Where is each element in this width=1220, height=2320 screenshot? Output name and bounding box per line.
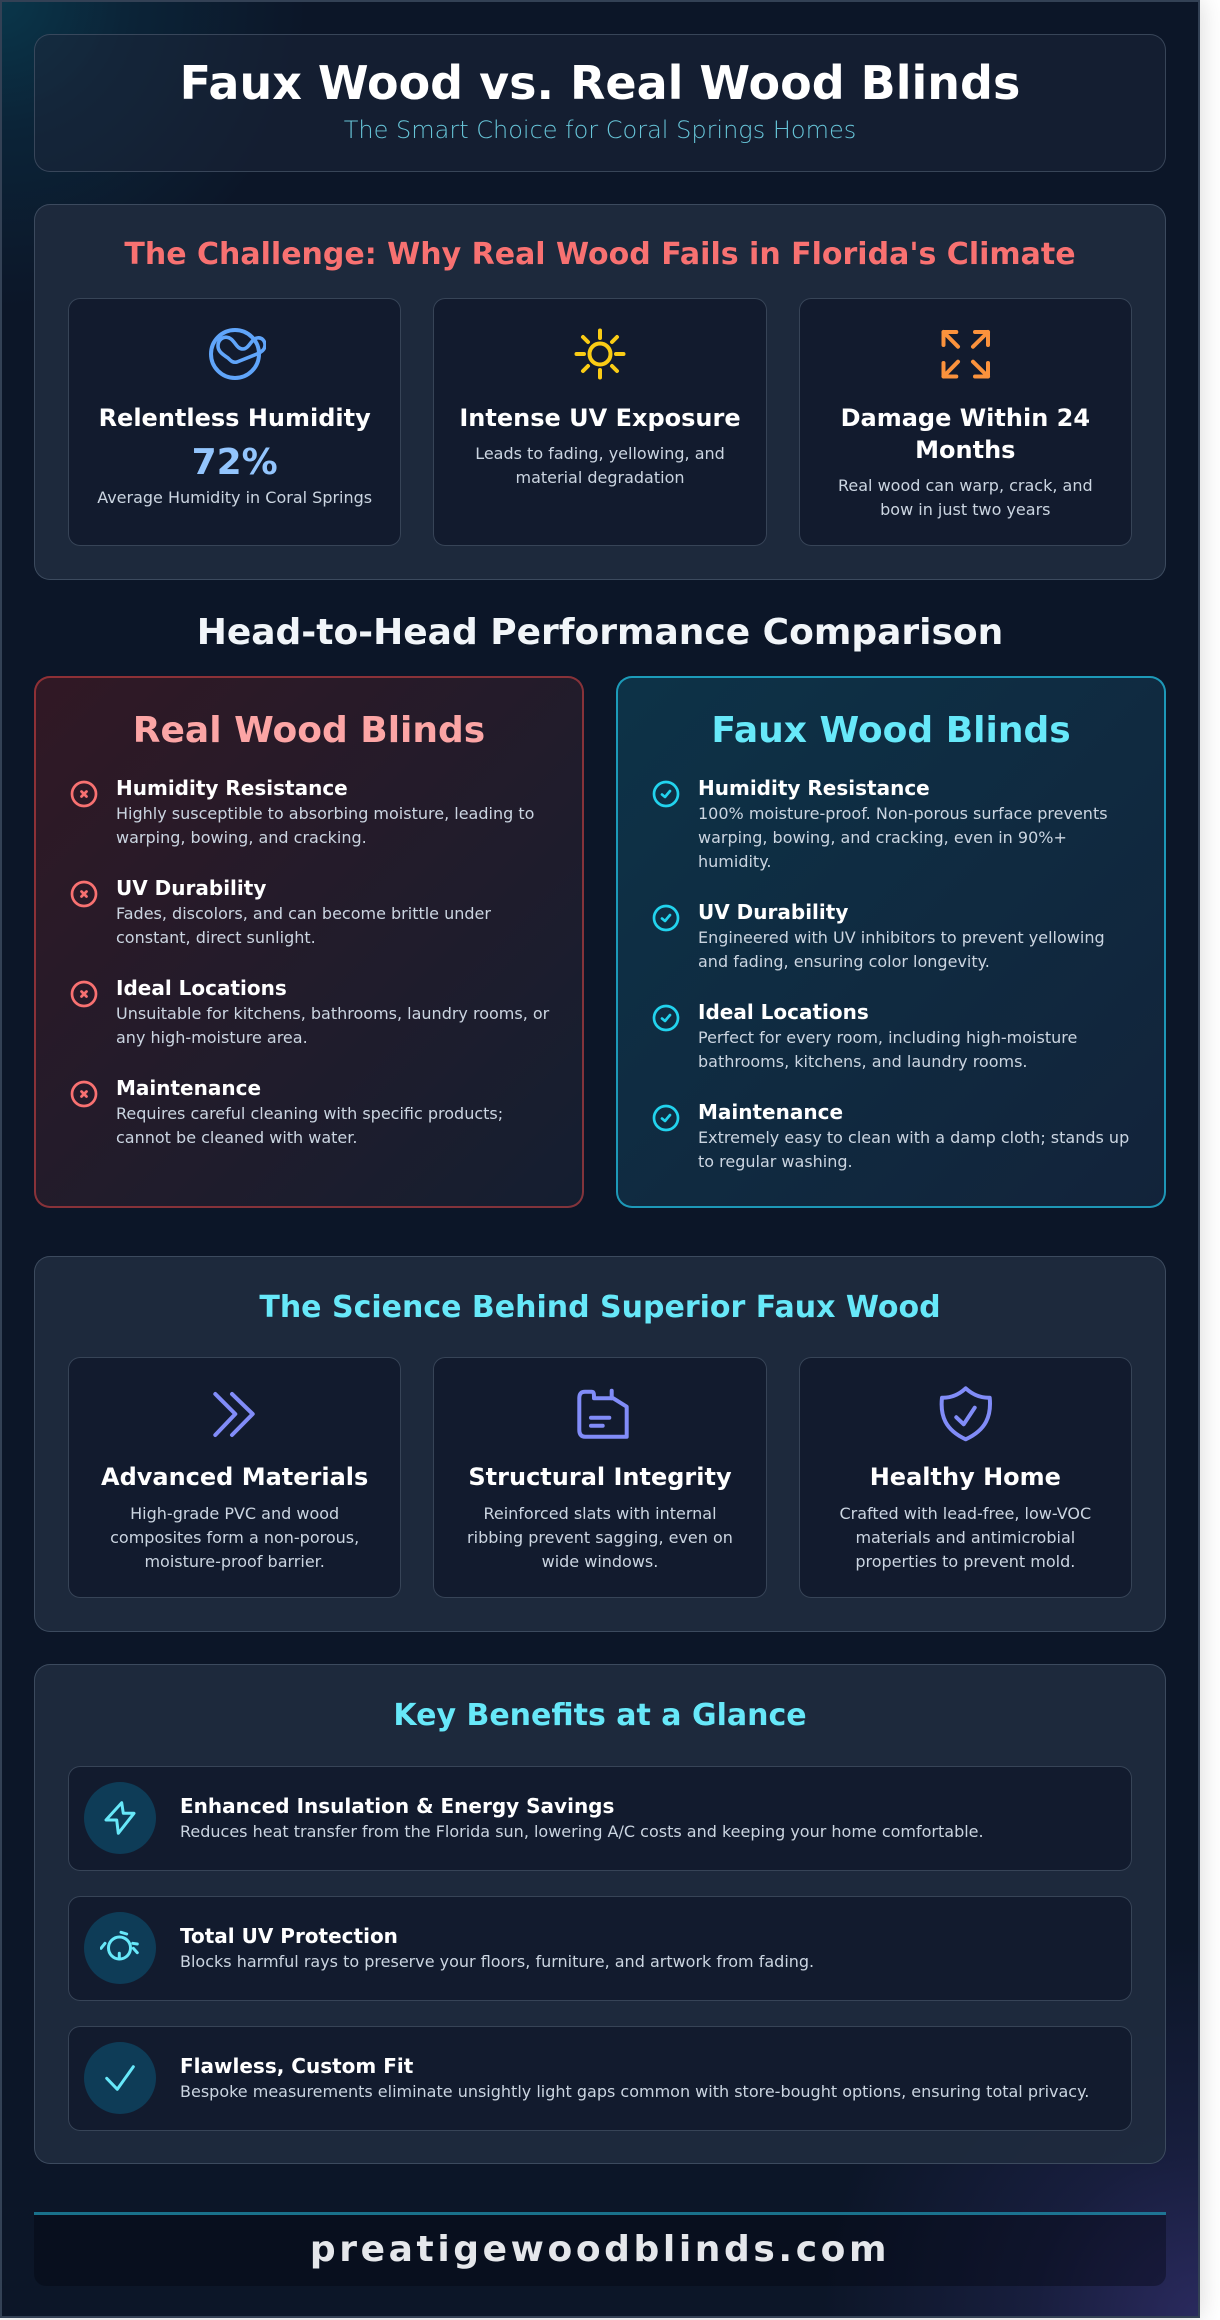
benefit: uv protection: Total UV Protection	[180, 1924, 398, 1948]
item: maintenance: Maintenance	[698, 1100, 843, 1124]
card: intense uv exposure	[433, 298, 767, 546]
heading: comparison: Head-to-Head Performance Comparison	[197, 612, 1003, 653]
icon: humidity swirl	[209, 328, 266, 380]
card text: Leads to fading, yellowing, and	[475, 444, 725, 463]
item: humidity resistance	[652, 776, 1108, 871]
item: humidity resistance: Humidity Resistance	[698, 776, 930, 800]
icon: dial with rays	[84, 1912, 156, 1984]
icon: double chevron	[213, 1392, 255, 1438]
item: uv durability	[70, 876, 491, 947]
item: humidity resistance: 100% moisture-proof. Non-porous surface prevents	[698, 804, 1108, 823]
icon: sun	[574, 328, 626, 380]
icon: shield check	[940, 1386, 992, 1442]
item: ideal locations	[652, 1000, 1077, 1071]
icon: x circle	[70, 880, 98, 908]
card title: Months	[915, 436, 1015, 464]
card text: composites form a non-porous,	[110, 1528, 359, 1547]
item: uv durability: Fades, discolors, and can become brittle under	[116, 904, 491, 923]
icon: lightning bolt	[84, 1782, 156, 1854]
item: humidity resistance: Highly susceptible to absorbing moisture, leading to	[116, 804, 534, 823]
card title	[841, 404, 1090, 464]
card text	[467, 1504, 733, 1571]
item: humidity resistance: warping, bowing, and cracking, even in 90%+	[698, 828, 1067, 847]
item: humidity resistance: humidity.	[698, 852, 771, 871]
card text: Average Humidity in Coral Springs	[97, 488, 372, 507]
panel: faux wood blinds	[616, 676, 1166, 1208]
card title: Relentless Humidity	[99, 404, 371, 432]
card text: moisture-proof barrier.	[144, 1552, 325, 1571]
item: ideal locations: Perfect for every room, including high-moisture	[698, 1028, 1077, 1047]
item: humidity resistance: warping, bowing, and cracking.	[116, 828, 367, 847]
benefit: uv protection	[68, 1896, 1132, 2001]
item: maintenance: cannot be cleaned with water.	[116, 1128, 357, 1147]
card title: Damage Within 24	[841, 404, 1090, 432]
benefit: insulation: Reduces heat transfer from the Florida sun, lowering A/C costs and keeping your home comfortable.	[180, 1822, 984, 1841]
card: structural integrity	[433, 1357, 767, 1598]
card text: wide windows.	[542, 1552, 658, 1571]
card text: Crafted with lead-free, low-VOC	[840, 1504, 1091, 1523]
icon: x circle	[70, 1080, 98, 1108]
card text: Real wood can warp, crack, and	[838, 476, 1093, 495]
card title: Intense UV Exposure	[459, 404, 741, 432]
icon: checkmark	[84, 2042, 156, 2114]
website url: preatigewoodblinds.com	[310, 2229, 890, 2270]
benefit: custom fit	[68, 2026, 1132, 2131]
benefit: insulation	[68, 1766, 1132, 1871]
item: ideal locations: any high-moisture area.	[116, 1028, 308, 1047]
item: ideal locations: bathrooms, kitchens, and laundry rooms.	[698, 1052, 1028, 1071]
header panel	[34, 34, 1166, 172]
icon: check circle	[652, 1104, 680, 1132]
item: uv durability: UV Durability	[698, 900, 848, 924]
item: maintenance	[70, 1076, 503, 1147]
panel: key benefits	[34, 1664, 1166, 2164]
card title: Advanced Materials	[101, 1463, 368, 1491]
item: uv durability: UV Durability	[116, 876, 266, 900]
statistic: 72%: 72%	[192, 442, 278, 483]
item: maintenance: Maintenance	[116, 1076, 261, 1100]
icon: x circle	[70, 780, 98, 808]
card text: bow in just two years	[880, 500, 1050, 519]
icon: document	[577, 1388, 629, 1439]
benefit: insulation: Enhanced Insulation & Energy Savings	[180, 1794, 614, 1818]
heading: the science: The Science Behind Superior Faux Wood	[259, 1290, 941, 1325]
item: humidity resistance	[70, 776, 534, 847]
icon: check circle	[652, 780, 680, 808]
icon: check circle	[652, 904, 680, 932]
item: ideal locations: Ideal Locations	[698, 1000, 869, 1024]
card title: Structural Integrity	[468, 1463, 732, 1491]
card text: High-grade PVC and wood	[130, 1504, 339, 1523]
item: ideal locations: Unsuitable for kitchens, bathrooms, laundry rooms, or	[116, 1004, 549, 1023]
panel: the challenge	[34, 204, 1166, 580]
title: Faux Wood vs. Real Wood Blinds	[180, 56, 1020, 110]
card title: Healthy Home	[870, 1463, 1061, 1491]
card text: Reinforced slats with internal	[483, 1504, 717, 1523]
card: advanced materials	[68, 1357, 401, 1598]
card: healthy home	[799, 1357, 1132, 1598]
card text: ribbing prevent sagging, even on	[467, 1528, 733, 1547]
heading: the challenge: The Challenge: Why Real Wood Fails in Florida's Climate	[124, 237, 1076, 272]
panel: real wood blinds	[34, 676, 584, 1208]
card text	[475, 444, 725, 487]
column title: Real Wood Blinds	[133, 710, 485, 751]
footer	[34, 2212, 1166, 2286]
item: uv durability: Engineered with UV inhibitors to prevent yellowing	[698, 928, 1105, 947]
benefit: custom fit: Bespoke measurements eliminate unsightly light gaps common with store-bought options, ensuring total privacy.	[180, 2082, 1089, 2101]
card: relentless humidity	[68, 298, 401, 546]
subtitle: The Smart Choice for Coral Springs Homes	[344, 116, 856, 144]
card text: material degradation	[515, 468, 684, 487]
icon: check circle	[652, 1004, 680, 1032]
item: maintenance: Extremely easy to clean with a damp cloth; stands up	[698, 1128, 1129, 1147]
panel: the science	[34, 1256, 1166, 1632]
item: maintenance: to regular washing.	[698, 1152, 853, 1171]
card text	[838, 476, 1093, 519]
item: uv durability: constant, direct sunlight.	[116, 928, 316, 947]
icon: x circle	[70, 980, 98, 1008]
item: maintenance: Requires careful cleaning with specific products;	[116, 1104, 503, 1123]
item: humidity resistance: Humidity Resistance	[116, 776, 348, 800]
card text: properties to prevent mold.	[855, 1552, 1075, 1571]
card text	[840, 1504, 1091, 1571]
benefit: custom fit: Flawless, Custom Fit	[180, 2054, 413, 2078]
card text: materials and antimicrobial	[855, 1528, 1075, 1547]
item: maintenance	[652, 1100, 1129, 1171]
benefit: uv protection: Blocks harmful rays to preserve your floors, furniture, and artwork from fading.	[180, 1952, 814, 1971]
heading: key benefits: Key Benefits at a Glance	[393, 1698, 807, 1733]
icon: expanding arrows	[941, 330, 990, 379]
item: uv durability	[652, 900, 1105, 971]
item: ideal locations: Ideal Locations	[116, 976, 287, 1000]
card text	[110, 1504, 359, 1571]
item: uv durability: and fading, ensuring color longevity.	[698, 952, 990, 971]
item: ideal locations	[70, 976, 550, 1047]
card: damage within 24 months	[799, 298, 1132, 546]
column title: Faux Wood Blinds	[711, 710, 1071, 751]
